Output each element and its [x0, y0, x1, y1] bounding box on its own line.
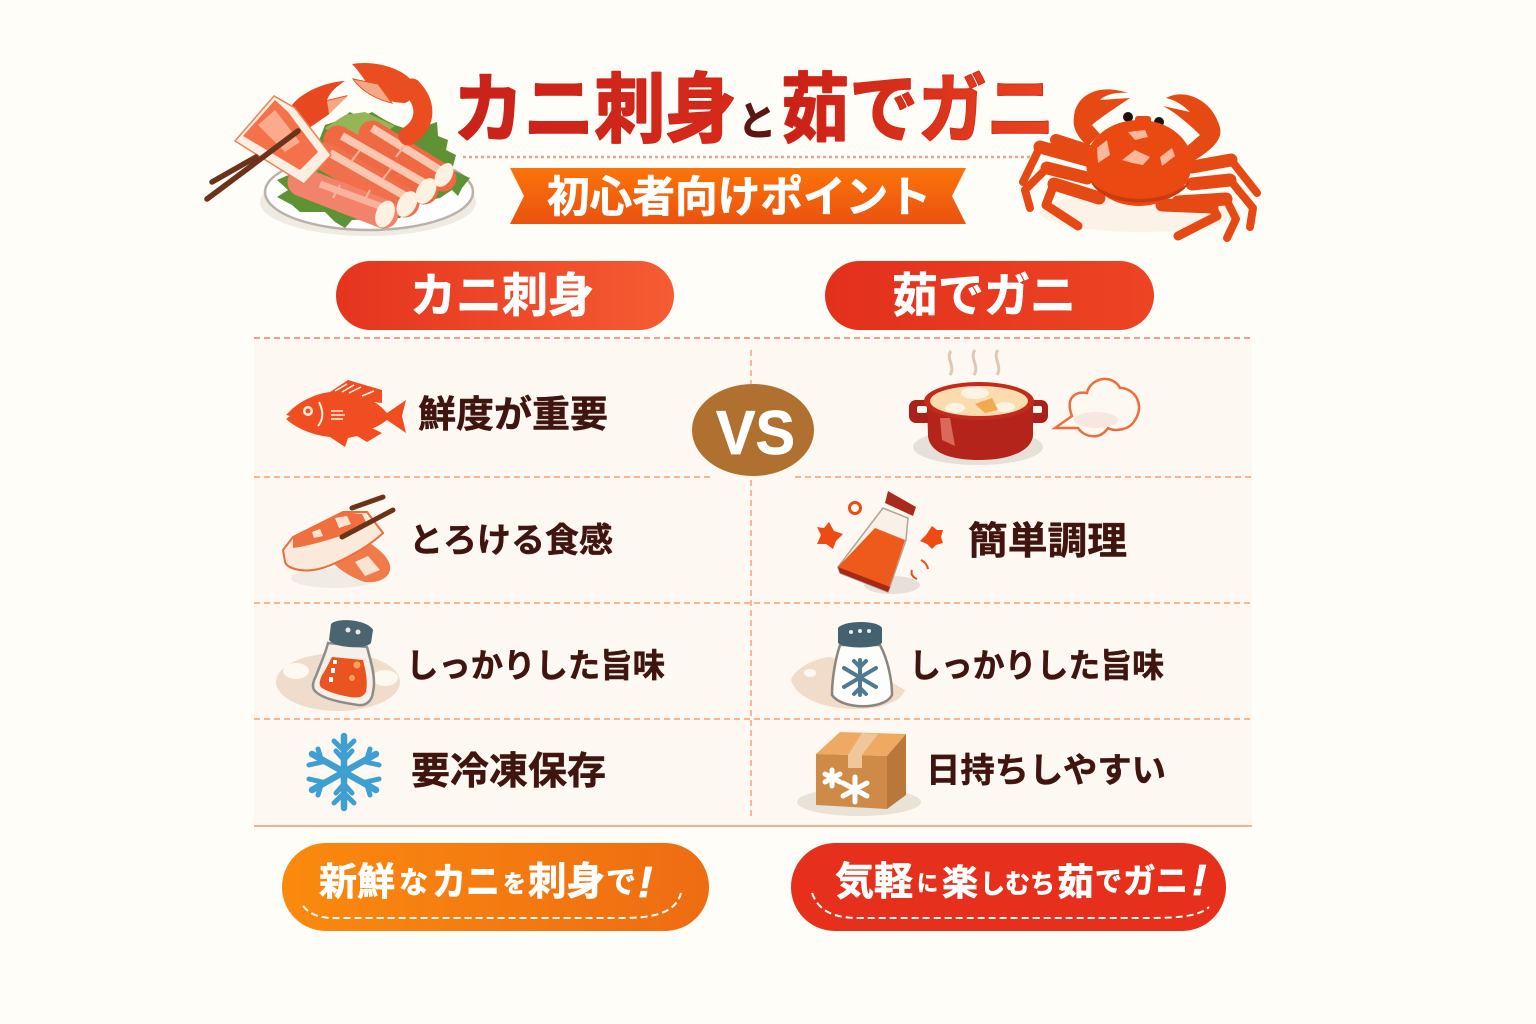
left row 4: frozen storage	[309, 736, 606, 808]
illustration: red crab	[1023, 89, 1257, 238]
label: しっかりした旨味	[909, 647, 1164, 684]
illustration: crab stick plate with chopsticks	[207, 63, 476, 236]
footer callout: right: !	[1192, 856, 1207, 905]
title: 茹でガニ	[781, 68, 1055, 153]
footer callout: right	[791, 843, 1226, 931]
label: 鮮度が重要	[418, 394, 608, 435]
icon: salt shaker with snowflake	[791, 622, 905, 709]
footer callout: left: カニ	[432, 862, 500, 904]
title: カニ刺身	[453, 68, 736, 153]
footer callout: right: に	[917, 871, 938, 896]
label: 日持ちしやすい	[926, 752, 1166, 790]
column header: 茹でガニ: 茹でガニ	[892, 269, 1076, 322]
VS badge	[692, 384, 814, 476]
footer callout: right: 楽	[942, 862, 978, 903]
icon: salt shaker with seasoning	[276, 620, 400, 711]
subtitle ribbon: 初心者向けポイント	[547, 174, 931, 222]
footer callout: left: を	[503, 871, 526, 898]
dotted divider under title	[463, 156, 1030, 158]
footer callout: left: 刺身	[528, 861, 605, 904]
footer callout: left: !	[638, 858, 653, 907]
title	[453, 68, 1055, 153]
footer callout: left: で	[606, 865, 636, 900]
label: とろける食感	[409, 522, 613, 560]
column header: カニ刺身: カニ刺身	[410, 269, 594, 322]
icon: steaming red pot	[909, 350, 1048, 465]
right row 4: keeps well	[797, 732, 1166, 816]
right row 2: easy cooking	[817, 491, 1127, 594]
icon: cardboard box with snowflakes	[797, 732, 921, 816]
footer callout: right: で	[1095, 866, 1122, 897]
icon: fish	[286, 380, 406, 447]
label: 要冷凍保存	[411, 751, 606, 793]
comparison table panel	[254, 338, 1252, 826]
right row 1: boiling pot	[909, 350, 1139, 465]
footer callout: right: しむち	[980, 869, 1055, 899]
footer callout: left: 新鮮	[319, 862, 395, 904]
left row 3: rich umami	[276, 620, 665, 711]
column header: カニ刺身	[336, 261, 674, 330]
label: 簡単調理	[968, 521, 1127, 563]
VS badge: VS	[716, 399, 795, 468]
icon: steam cloud bubble	[1055, 379, 1139, 436]
footer callout: left: な	[399, 867, 428, 900]
left row 1: freshness	[286, 380, 608, 447]
column header: 茹でガニ	[825, 261, 1154, 330]
footer callout: right: 茹	[1057, 862, 1094, 903]
icon: sauce bottle with sparks	[817, 491, 943, 594]
left row 2: melting texture	[283, 497, 613, 588]
footer callout: right: ガニ	[1123, 863, 1188, 901]
footer callout: left	[282, 843, 709, 931]
icon: crab sashimi with chopsticks	[283, 497, 393, 588]
footer callout: right: 気軽	[835, 861, 913, 904]
right row 3: rich umami	[791, 622, 1164, 709]
title: と	[738, 100, 776, 144]
label: しっかりした旨味	[406, 647, 665, 684]
icon: blue snowflake	[309, 736, 379, 808]
